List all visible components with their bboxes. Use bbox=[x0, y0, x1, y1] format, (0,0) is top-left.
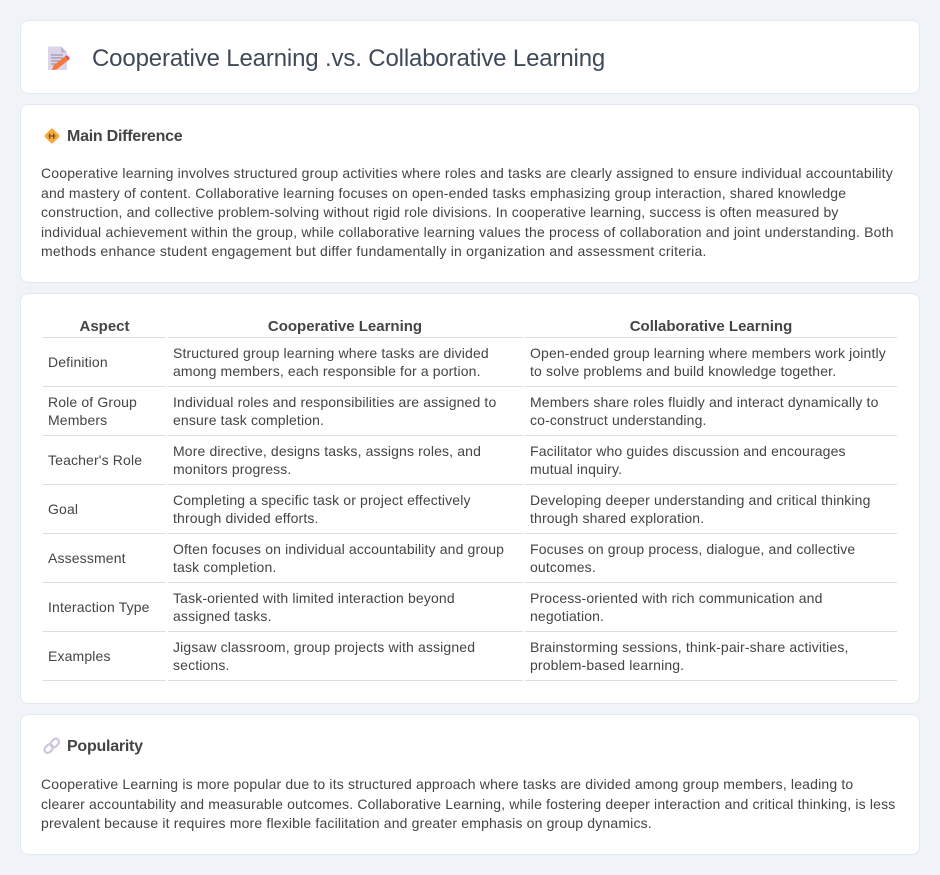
text block: main difference: methods enhance student engagement but differ fundamentally in organization and assessment criteria. bbox=[41, 243, 707, 259]
table: comparison: Members share roles fluidly and interact dynamically to bbox=[530, 394, 879, 410]
panel: main difference bbox=[20, 104, 920, 283]
icon: chain link bbox=[43, 738, 60, 754]
row: goal: Goal bbox=[48, 501, 78, 517]
table: comparison: Developing deeper understanding and critical thinking bbox=[530, 492, 871, 508]
table: comparison: Often focuses on individual accountability and group bbox=[173, 541, 504, 557]
table: comparison: Jigsaw classroom, group projects with assigned bbox=[173, 639, 475, 655]
table: comparison: Completing a specific task or project effectively bbox=[173, 492, 471, 508]
row: definition: Definition bbox=[48, 354, 108, 370]
table: comparison: problem-based learning. bbox=[530, 656, 684, 672]
text block: main difference: individual achievement within the group, while collaborative learning values the process of collaboration and joint understanding. Both bbox=[41, 224, 894, 240]
title: Cooperative Learning .vs. Collaborative Learning bbox=[92, 45, 605, 72]
row: assessment: Assessment bbox=[48, 550, 126, 566]
table: comparison: to solve problems and build knowledge together. bbox=[530, 362, 836, 378]
table: comparison: mutual inquiry. bbox=[530, 460, 622, 476]
table: comparison: through shared exploration. bbox=[530, 510, 704, 526]
table: comparison: negotiation. bbox=[530, 608, 604, 624]
table: comparison: Open-ended group learning where members work jointly bbox=[530, 345, 886, 361]
table: comparison: assigned tasks. bbox=[173, 608, 272, 624]
row: role of group members: Members bbox=[48, 412, 107, 428]
text block: main difference: Cooperative learning involves structured group activities where roles and tasks are clearly assigned to ensure individual accountability bbox=[41, 165, 893, 181]
heading: popularity: Popularity bbox=[67, 738, 143, 755]
table: comparison: outcomes. bbox=[530, 558, 596, 574]
text block: popularity: prevalent because it requires more flexible facilitation and greater emphasis on group dynamics. bbox=[41, 815, 652, 831]
panel: comparison table bbox=[20, 293, 920, 704]
column header: aspect: Aspect bbox=[79, 318, 130, 335]
icon: memo with pencil bbox=[48, 46, 70, 70]
row: interaction type: Interaction Type bbox=[48, 599, 150, 615]
table: comparison: Individual roles and responsibilities are assigned to bbox=[173, 394, 496, 410]
icon: diamond sign bbox=[44, 128, 60, 144]
row: role of group members: Role of Group bbox=[48, 394, 137, 410]
column header: cooperative learning: Cooperative Learning bbox=[268, 318, 422, 335]
table: comparison: Facilitator who guides discussion and encourages bbox=[530, 443, 846, 459]
text block: main difference bbox=[41, 165, 894, 259]
panel: popularity bbox=[20, 714, 920, 855]
table: comparison: Focuses on group process, dialogue, and collective bbox=[530, 541, 855, 557]
text block: popularity: clearer accountability and measurable outcomes. Collaborative Learning, while fostering deeper interaction and critical thinking, is less bbox=[41, 796, 895, 812]
table: comparison: Process-oriented with rich communication and bbox=[530, 590, 823, 606]
table: comparison: among members, each responsible for a portion. bbox=[173, 362, 481, 378]
heading: main difference: Main Difference bbox=[67, 128, 182, 145]
panel: title header bbox=[20, 20, 920, 94]
text block: popularity: Cooperative Learning is more popular due to its structured approach where tasks are divided among group members, leading to bbox=[41, 776, 853, 792]
text block: popularity bbox=[41, 776, 895, 831]
text block: main difference: construction, and collective problem-solving without rigid role divisions. In cooperative learning, success is often measured by bbox=[41, 204, 839, 220]
table: comparison: monitors progress. bbox=[173, 460, 291, 476]
table: comparison: through divided efforts. bbox=[173, 510, 319, 526]
table: comparison: co-construct understanding. bbox=[530, 412, 707, 428]
text block: main difference: and mastery of content. Collaborative learning focuses on open-ended tasks emphasizing group interaction, shared knowledge bbox=[41, 185, 846, 201]
table: comparison: Structured group learning where tasks are divided bbox=[173, 345, 489, 361]
column header: collaborative learning: Collaborative Learning bbox=[630, 318, 792, 335]
table: comparison: Task-oriented with limited interaction beyond bbox=[173, 590, 455, 606]
table: comparison: Brainstorming sessions, think-pair-share activities, bbox=[530, 639, 849, 655]
table: comparison: task completion. bbox=[173, 558, 276, 574]
table: comparison: ensure task completion. bbox=[173, 412, 324, 428]
row: teacher's role: Teacher's Role bbox=[48, 452, 142, 468]
row: role of group members bbox=[48, 394, 137, 428]
table: comparison: sections. bbox=[173, 656, 230, 672]
row: examples: Examples bbox=[48, 648, 111, 664]
table: comparison: More directive, designs tasks, assigns roles, and bbox=[173, 443, 481, 459]
